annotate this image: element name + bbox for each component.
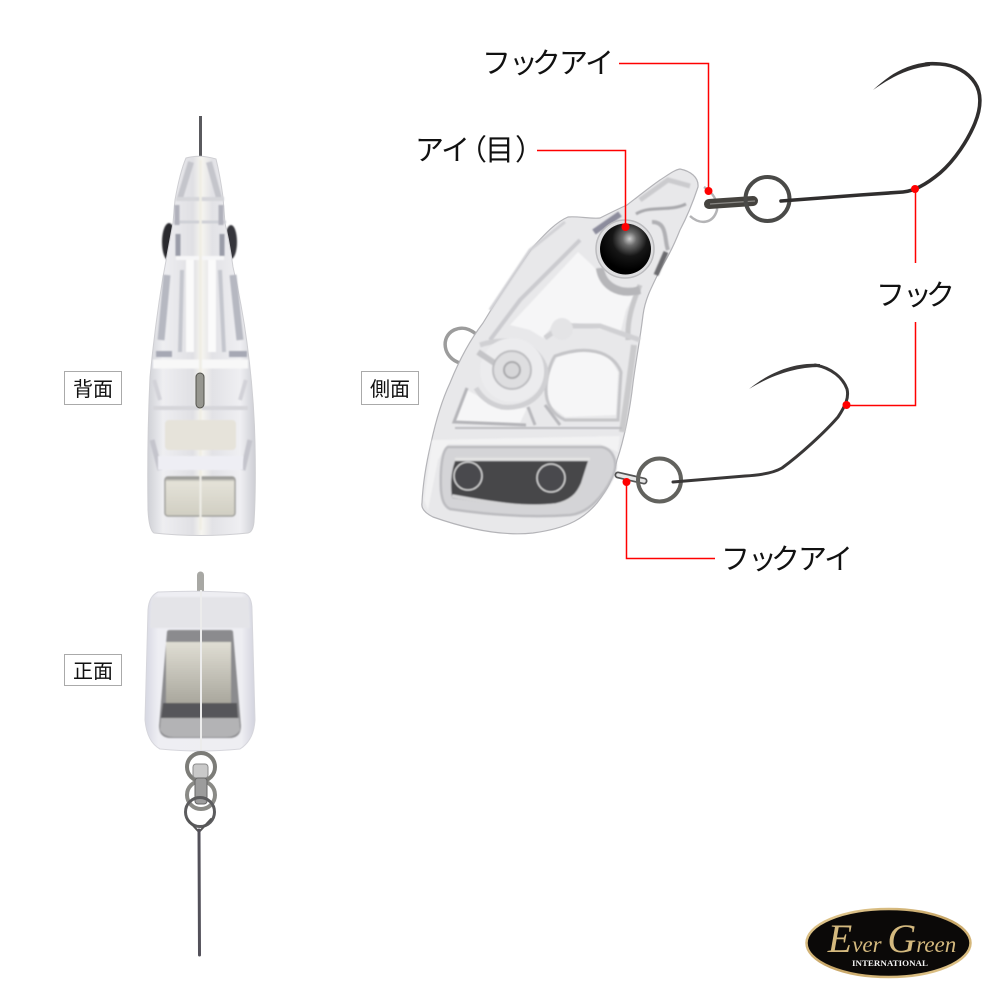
panel: side view lure <box>422 169 717 534</box>
split ring <box>746 177 790 221</box>
callout: hook eye top <box>482 48 712 195</box>
keel wire <box>196 373 204 408</box>
label: front view <box>64 654 122 686</box>
label: front view: 正面 <box>73 661 113 683</box>
swivel rings and hook <box>186 753 215 955</box>
leader <box>626 482 715 558</box>
back body details <box>152 160 250 530</box>
split ring <box>638 458 681 502</box>
label: side view: 側面 <box>370 378 410 401</box>
label: back view <box>64 372 122 404</box>
logo: Ever Green International <box>806 909 970 977</box>
front top band <box>150 597 250 628</box>
leader <box>537 150 626 226</box>
eye wire <box>618 475 644 481</box>
eye ball <box>596 220 654 278</box>
leader <box>847 189 916 406</box>
logo: Ever Green International: Ever Green <box>827 916 956 961</box>
callout: eye: アイ（目） <box>415 135 544 167</box>
back body outline <box>148 156 255 536</box>
pivot circle <box>478 338 544 402</box>
callout: eye <box>415 135 630 231</box>
label: side view <box>362 372 418 404</box>
inner frame ribs <box>454 222 640 432</box>
back mid band <box>158 420 243 470</box>
belly weight <box>441 447 615 516</box>
hook shank and bend <box>781 64 980 201</box>
hook point <box>749 364 820 389</box>
callout: hook eye top: フックアイ <box>482 48 614 80</box>
weight seen from back <box>165 476 235 518</box>
panel: front view lure <box>145 575 255 955</box>
hardware: lower split ring and hook <box>618 364 848 502</box>
label: back view: 背面 <box>73 378 113 401</box>
callout: hook: フック <box>876 280 955 312</box>
swivel link <box>709 201 753 204</box>
side body outline <box>422 169 698 534</box>
eyes seen from back <box>162 223 237 261</box>
rear hook eye wire <box>445 328 476 363</box>
leader <box>619 64 708 190</box>
top line tie <box>197 575 204 592</box>
head details <box>594 180 690 292</box>
front hook eye wire <box>690 187 717 222</box>
line tie at nose <box>199 116 202 156</box>
callout: hook eye bottom <box>622 478 853 576</box>
callout: hook <box>842 185 955 409</box>
callout: hook eye bottom: フックアイ <box>721 544 853 576</box>
logo: Ever Green International: INTERNATIONAL <box>852 958 928 968</box>
hook point <box>873 62 930 90</box>
front weight <box>159 630 241 738</box>
hook shank and bend <box>673 365 848 482</box>
front body outline <box>145 591 255 751</box>
small round boss <box>551 318 573 340</box>
panel: back view lure <box>148 116 255 536</box>
side windows <box>424 252 640 510</box>
hardware: upper split ring and hook <box>709 62 980 221</box>
